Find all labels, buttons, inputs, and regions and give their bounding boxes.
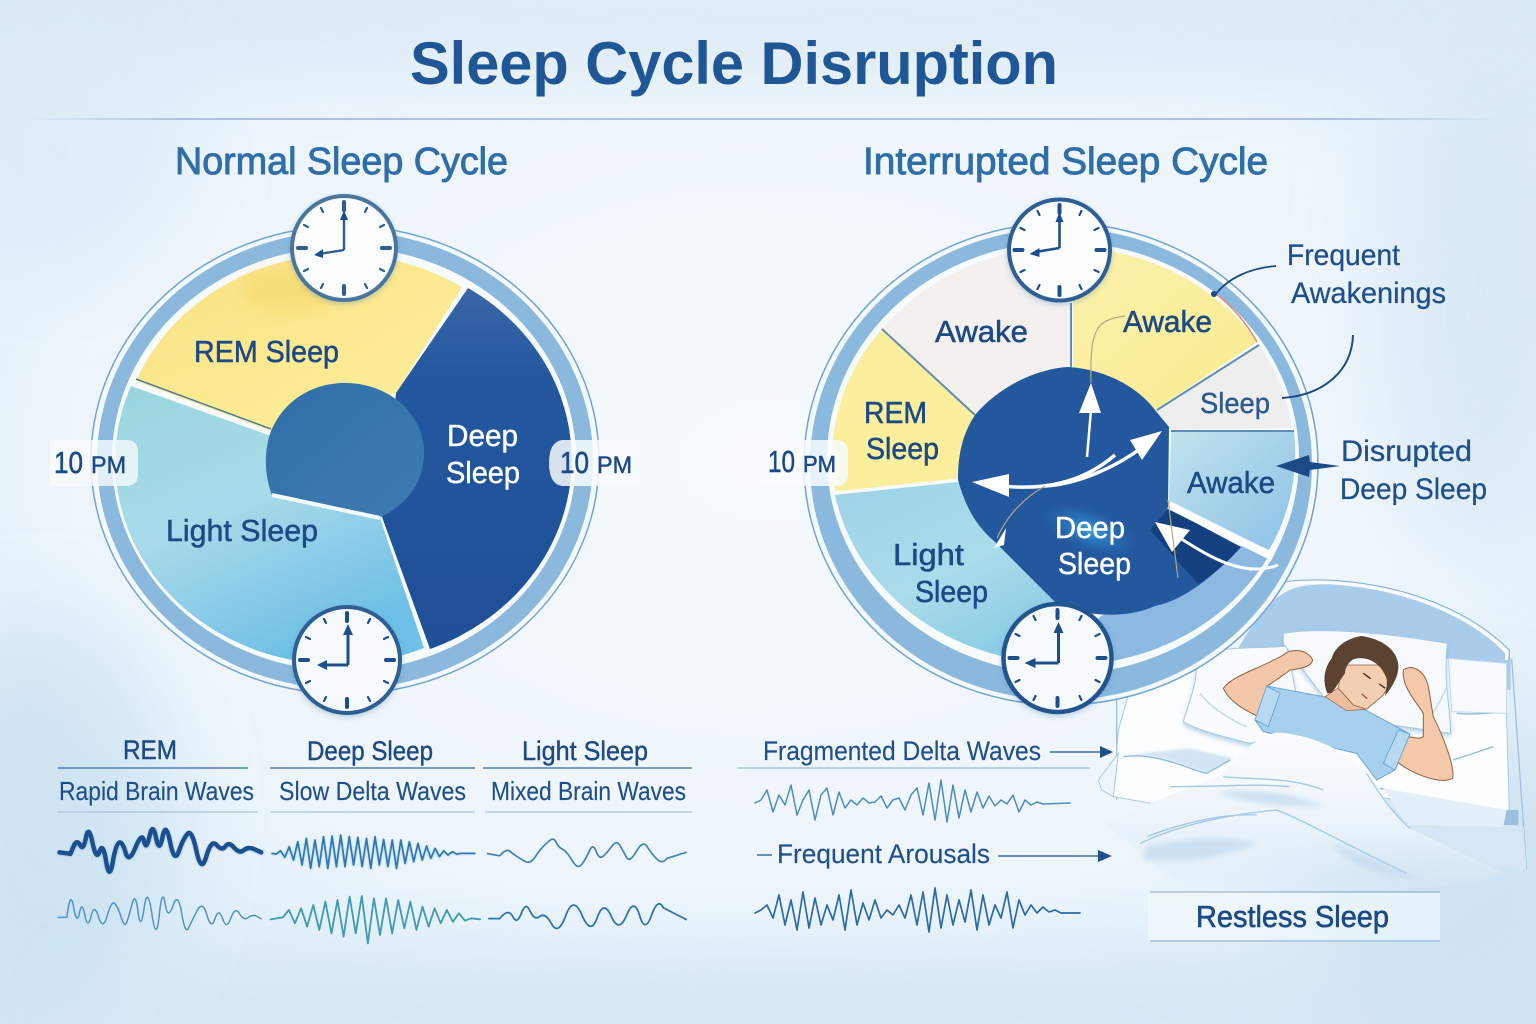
label: awake grey: Awake <box>935 314 1028 349</box>
legend: rem heading: REM <box>123 735 177 765</box>
segment: rem sleep <box>832 329 975 492</box>
callout: disrupted deep sleep <box>1276 435 1487 506</box>
legend: frequent arousals: Frequent Arousals <box>777 839 990 869</box>
wave: rem light <box>58 897 261 930</box>
label: 10 pm left: PM <box>91 452 126 479</box>
label: restless sleep: Restless Sleep <box>1196 899 1389 934</box>
segment: deep sleep <box>382 288 572 649</box>
rem label: REM Sleep <box>194 334 339 369</box>
label: restless sleep <box>1148 892 1440 942</box>
label: awake yellow: Awake <box>1123 304 1212 339</box>
label: light sleep: Sleep <box>915 574 988 609</box>
segment: lower blue wedge <box>1055 546 1271 665</box>
shirt <box>1255 686 1410 780</box>
label: deep sleep: Sleep <box>1058 546 1131 581</box>
arm left <box>1223 650 1313 717</box>
legend: slow delta waves: Slow Delta Waves <box>279 776 466 806</box>
label: 10 pm left <box>50 440 138 486</box>
segment: rem sleep <box>136 255 462 431</box>
deep sleep label: Sleep <box>446 455 520 490</box>
label: awake blue: Awake <box>1187 465 1275 500</box>
heading: normal sleep cycle: Normal Sleep Cycle <box>175 141 508 183</box>
label: 10 pm interrupted: 10 <box>768 444 795 479</box>
callout: frequent awakenings <box>1211 239 1446 398</box>
label: sleep: Sleep <box>1200 388 1270 420</box>
light sleep label: Light Sleep <box>166 513 318 548</box>
illustration: person sleeping restlessly in bed <box>1098 580 1527 889</box>
duvet <box>1107 733 1507 889</box>
icon: clock bottom right <box>1004 604 1112 712</box>
label: 10 pm interrupted <box>760 440 848 486</box>
label: rem sleep: Sleep <box>866 431 939 466</box>
callout: frequent awakenings: Frequent <box>1287 239 1401 272</box>
callout: disrupted deep sleep: Deep Sleep <box>1340 473 1487 506</box>
label: rem sleep: REM <box>864 395 927 430</box>
callout: frequent awakenings: Awakenings <box>1291 277 1446 310</box>
segment: awake blue <box>1169 432 1295 550</box>
deep sleep label <box>446 418 520 490</box>
wave: deep upper <box>272 835 475 868</box>
icon: clock top right <box>1009 200 1110 300</box>
deep sleep label: Deep <box>447 418 518 453</box>
label: 10 pm left: 10 <box>54 445 83 480</box>
label: light sleep: Light <box>893 537 964 572</box>
segment: centre hub <box>266 383 424 517</box>
arrows inside deep sleep <box>972 316 1278 578</box>
wave: rem heavy <box>60 829 261 872</box>
panel: normal sleep cycle dial <box>91 226 599 694</box>
label: deep sleep: Deep <box>1055 510 1125 545</box>
legend: deep sleep heading: Deep Sleep <box>307 736 433 766</box>
legend: frequent arousals <box>757 839 1112 869</box>
callout: disrupted deep sleep: Disrupted <box>1341 435 1472 468</box>
bed sheets <box>1113 658 1509 812</box>
label: light sleep <box>893 537 988 609</box>
legend: light sleep heading: Light Sleep <box>522 736 648 766</box>
chart: arousal wave <box>755 888 1080 932</box>
segment: awake grey <box>882 247 1070 415</box>
segment: sleep grey <box>1155 345 1292 430</box>
wave: deep lower <box>271 896 480 943</box>
legend: rapid brain waves: Rapid Brain Waves <box>59 776 254 806</box>
segment: light sleep <box>115 386 424 664</box>
wave: light lower <box>489 904 686 928</box>
label: 10 pm interrupted: PM <box>803 451 836 477</box>
panel: interrupted sleep cycle dial <box>804 223 1318 705</box>
heading: interrupted sleep cycle: Interrupted Sleep Cycle <box>863 141 1268 183</box>
legend: mixed brain waves: Mixed Brain Waves <box>491 776 686 806</box>
head <box>1324 636 1398 711</box>
arm right <box>1395 668 1453 780</box>
legend: fragmented delta waves: Fragmented Delta Waves <box>763 736 1041 766</box>
label: 10 pm right <box>549 440 640 486</box>
chart: fragmented delta wave <box>755 780 1070 822</box>
segment: light sleep <box>835 482 1055 663</box>
label: 10 pm right: PM <box>597 452 632 479</box>
segment: awake yellow <box>1073 247 1257 410</box>
label: rem sleep <box>864 395 939 466</box>
segment: deep sleep blob <box>958 367 1241 615</box>
chart: normal brain waveforms <box>58 829 686 943</box>
bed frame and headboard <box>1117 580 1527 870</box>
icon: clock top left <box>292 196 396 300</box>
label: deep sleep <box>1055 510 1131 581</box>
pillows <box>1183 631 1451 743</box>
label: 10 pm right: 10 <box>560 445 589 480</box>
title: Sleep Cycle Disruption <box>410 30 1058 97</box>
icon: clock bottom left <box>294 607 400 713</box>
wave: light upper <box>488 839 686 866</box>
panel: normal brain wave legend <box>57 735 692 812</box>
